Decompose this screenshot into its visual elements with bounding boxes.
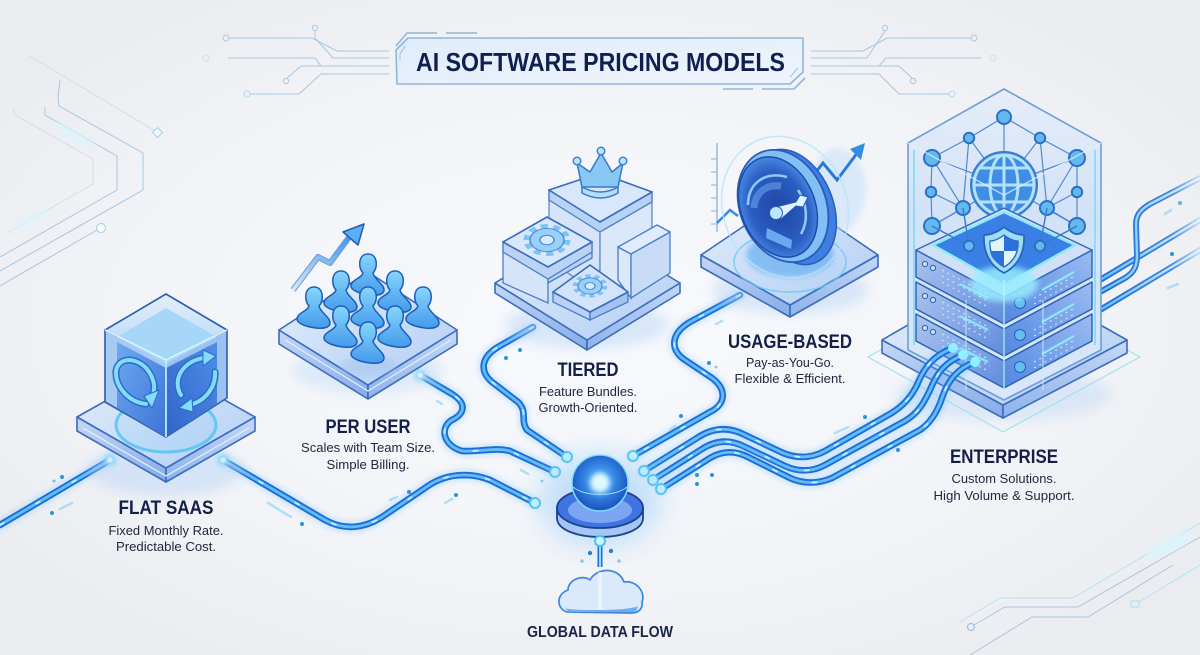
- icon: team of users: [297, 254, 439, 363]
- description: per user: Simple Billing.: [326, 457, 410, 472]
- icon: shield: [984, 227, 1024, 273]
- glass enclosure: [908, 89, 1101, 400]
- connector: usage to hub: [628, 295, 740, 461]
- connector: flat SaaS left: [0, 454, 116, 525]
- description: per user: [301, 440, 435, 472]
- icon: cube with cycle arrows: [105, 294, 227, 437]
- flat platform: [77, 367, 255, 482]
- heading: enterprise: ENTERPRISE: [950, 447, 1058, 468]
- icon: growth arrow: [293, 224, 364, 290]
- panel: tiered: [495, 147, 680, 415]
- glass front edges: [908, 143, 1101, 390]
- cloud link: [580, 536, 621, 567]
- description: per user: Scales with Team Size.: [301, 440, 435, 455]
- panel: usage-based: [701, 117, 878, 386]
- description: enterprise: Custom Solutions.: [952, 471, 1056, 486]
- connector: tiered to hub: [484, 327, 572, 462]
- icon: cloud: [559, 570, 643, 613]
- heading: per user: PER USER: [326, 417, 411, 438]
- chart axis and trend line: [711, 143, 866, 232]
- description: flat SaaS: Predictable Cost.: [116, 539, 216, 554]
- heading: flat SaaS: FLAT SAAS: [118, 498, 214, 519]
- icon: crown: [573, 147, 627, 198]
- hub: data orb on pedestal: [540, 454, 660, 546]
- server stack: [916, 208, 1092, 392]
- connector: per user to hub: [414, 369, 560, 477]
- connector: hub to enterprise A: [639, 343, 958, 476]
- heading: tiered: TIERED: [558, 360, 618, 381]
- icon: network graph: [924, 110, 1085, 246]
- description: usage-based: Pay-as-You-Go.: [746, 355, 834, 370]
- description: flat SaaS: [108, 523, 224, 554]
- tier block: right: [618, 225, 670, 298]
- description: tiered: [538, 384, 638, 415]
- title text: AI SOFTWARE PRICING MODELS: [416, 47, 785, 77]
- connector: hub to enterprise C: [656, 357, 980, 494]
- connector: flat SaaS to hub: [217, 454, 540, 527]
- panel: enterprise: [868, 89, 1140, 503]
- title banner: [396, 33, 805, 89]
- label: global data flow: GLOBAL DATA FLOW: [527, 624, 673, 641]
- right side cables: [1100, 178, 1200, 310]
- tier block: gear small: [553, 265, 628, 320]
- heading: usage-based: USAGE-BASED: [728, 332, 852, 353]
- description: enterprise: High Volume & Support.: [934, 488, 1074, 503]
- icon: lower network nodes: [932, 208, 1077, 251]
- description: tiered: Growth-Oriented.: [538, 400, 638, 415]
- tier block: top: [549, 173, 652, 295]
- tiered platform: [495, 227, 680, 350]
- panel: per user: [279, 224, 457, 472]
- icon: globe: [971, 152, 1037, 218]
- description: usage-based: [734, 355, 846, 386]
- panel: flat SaaS: [77, 294, 255, 554]
- description: tiered: Feature Bundles.: [539, 384, 637, 399]
- tier block: gear left: [503, 217, 592, 303]
- per user platform: [279, 272, 457, 399]
- connector: hub to enterprise B: [648, 350, 968, 485]
- icon: speedometer gauge: [701, 117, 869, 297]
- description: flat SaaS: Fixed Monthly Rate.: [108, 523, 224, 538]
- usage platform: [701, 195, 878, 317]
- description: usage-based: Flexible & Efficient.: [734, 371, 846, 386]
- description: enterprise: [934, 471, 1074, 503]
- enterprise platform: [868, 270, 1140, 432]
- data particles: [50, 201, 1182, 526]
